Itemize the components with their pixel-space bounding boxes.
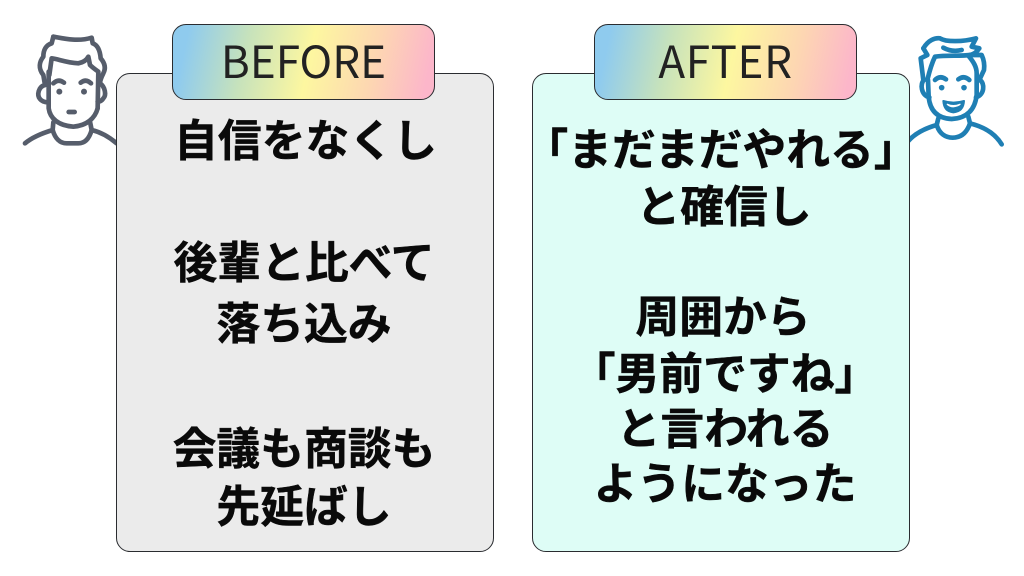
text: before line 4: 会議も商談も (173, 425, 435, 474)
heading: BEFORE: BEFORE (221, 27, 386, 91)
text: before line 2: 後輩と比べて (173, 239, 435, 288)
text: before line 3: 落ち込み (216, 300, 392, 349)
text: after line 3: 周囲から (635, 293, 811, 342)
heading: BEFORE (172, 24, 435, 100)
text: after line 1: 「まだまだやれる」 (546, 126, 896, 175)
heading: AFTER (594, 24, 857, 100)
text: after line 5: と言われる (617, 405, 833, 454)
icon: discouraged man (22, 34, 116, 146)
panel: after (532, 73, 910, 552)
text: before line 5: 先延ばし (216, 483, 392, 532)
icon: happy man (910, 36, 1004, 147)
text: after line 4: 「男前ですね」 (594, 350, 856, 399)
text: after line 2: と確信し (636, 183, 812, 232)
panel: before (116, 73, 494, 552)
text: after line 6: ようになった (594, 460, 856, 509)
heading: AFTER: AFTER (658, 27, 793, 91)
text: before line 1: 自信をなくし (174, 117, 437, 166)
